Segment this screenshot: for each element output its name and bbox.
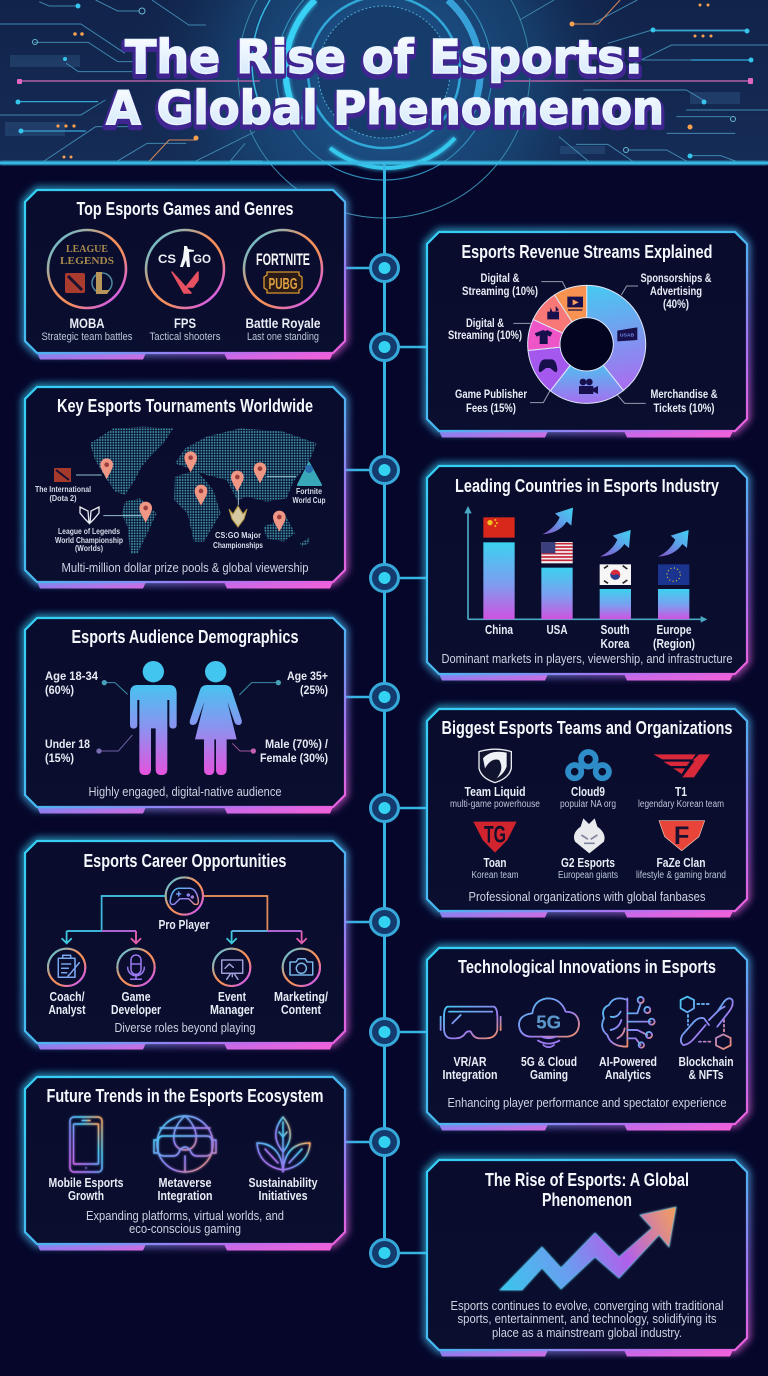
panel: key esports tournaments: [25, 387, 345, 588]
panel: top esports games and genres: [25, 190, 345, 360]
team labels: FaZe Clan: [656, 855, 706, 870]
donut labels: Game Publisher: [455, 389, 527, 401]
CS:GO major trophy and label: CS:GO Major: [215, 530, 262, 540]
team labels: Korean team: [472, 870, 518, 881]
donut labels: Streaming (10%): [448, 330, 522, 342]
caption: Expanding platforms, virtual worlds, and: [86, 1208, 284, 1223]
career labels: Event: [218, 990, 247, 1004]
title: [105, 30, 665, 138]
title: A Global Phenomenon: [105, 84, 665, 138]
demographic labels: (60%): [45, 683, 74, 697]
tech labels: Gaming: [530, 1067, 568, 1082]
donut labels: [448, 273, 718, 415]
donut labels: Fees (15%): [466, 403, 516, 415]
heading: Esports Revenue Streams Explained: [462, 242, 712, 262]
game ring: battle royale logos: [244, 230, 322, 308]
Worlds icon and label: (Worlds): [75, 543, 103, 553]
panel: audience demographics: [25, 618, 345, 814]
flag: South Korea: [600, 564, 631, 585]
career labels: Marketing/: [274, 990, 328, 1004]
icon: 5G cloud: 5G: [536, 1011, 561, 1032]
panel: leading countries: [427, 466, 747, 680]
game ring: MOBA logos: LEAGUE: [66, 244, 108, 255]
genre labels: Tactical shooters: [150, 331, 221, 343]
genre labels: [42, 315, 321, 343]
heading: Esports Career Opportunities: [84, 851, 286, 871]
Worlds icon and label: World Championship: [55, 535, 123, 545]
tech labels: Blockchain: [678, 1054, 734, 1069]
country labels: South: [600, 622, 630, 637]
team labels: Cloud9: [571, 784, 605, 799]
donut labels: Digital &: [466, 318, 504, 330]
conclusion text: place as a mainstream global industry.: [492, 1325, 682, 1340]
career labels: Coach/: [50, 990, 85, 1004]
logo: Team Liquid: [479, 749, 511, 783]
genre labels: FPS: [174, 315, 196, 331]
conclusion text: [450, 1298, 724, 1340]
caption: Highly engaged, digital-native audience: [88, 784, 282, 799]
logo: Cloud9: [568, 752, 609, 778]
game ring: MOBA logos: LEGENDS: [60, 255, 114, 267]
heading: Top Esports Games and Genres: [76, 199, 294, 219]
title: The Rise of Esports:: [125, 30, 643, 84]
career tree diagram: [48, 877, 320, 986]
CS:GO major trophy and label: Championships: [213, 540, 263, 550]
heading: [485, 1170, 689, 1210]
icon: VR headset: [441, 1007, 501, 1038]
country labels: China: [485, 622, 514, 637]
country labels: Europe: [656, 622, 692, 637]
dotted world map: [76, 427, 317, 554]
donut chart: USAB: [620, 333, 634, 339]
Worlds icon and label: League of Legends: [58, 526, 120, 536]
team labels: [450, 784, 726, 881]
country labels: Korea: [600, 636, 630, 651]
team labels: Toan: [484, 855, 507, 870]
tech labels: Analytics: [605, 1067, 651, 1082]
donut chart: [513, 282, 646, 403]
caption: Multi-million dollar prize pools & global viewership: [62, 560, 308, 575]
growth arrows: [542, 508, 689, 557]
career labels: Developer: [111, 1003, 161, 1017]
career labels: Pro Player: [158, 918, 210, 932]
heading: Key Esports Tournaments Worldwide: [57, 396, 313, 416]
demographic labels: Male (70%) /: [265, 737, 329, 751]
tech labels: 5G & Cloud: [521, 1054, 577, 1069]
team labels: lifestyle & gaming brand: [636, 870, 726, 881]
flag: China: [483, 517, 515, 538]
heading: Esports Audience Demographics: [72, 627, 298, 647]
caption: Diverse roles beyond playing: [114, 1020, 256, 1035]
demographic labels: [45, 669, 329, 765]
icon: metaverse headset: [154, 1116, 216, 1172]
logo: T1: [653, 754, 710, 777]
career labels: Game: [122, 990, 151, 1004]
zigzag growth arrow: [500, 1207, 676, 1290]
heading: Technological Innovations in Esports: [458, 957, 716, 977]
team logos: [473, 749, 710, 853]
team labels: popular NA org: [560, 799, 616, 810]
career labels: Analyst: [48, 1003, 86, 1017]
donut labels: Tickets (10%): [654, 403, 715, 415]
icon: AI brain: [602, 997, 655, 1048]
heading: Phenomenon: [542, 1190, 632, 1210]
male and female figures: [96, 661, 281, 775]
panel: biggest teams: [427, 709, 747, 918]
donut labels: Digital &: [480, 273, 520, 285]
icon: sustainability plant: [257, 1117, 310, 1172]
career labels: Content: [281, 1003, 322, 1017]
team labels: multi-game powerhouse: [450, 799, 540, 810]
panel: technological innovations: [427, 948, 747, 1130]
panel: career opportunities: [25, 841, 345, 1050]
game ring: FPS logos: [146, 230, 224, 308]
demographic labels: Age 35+: [287, 669, 328, 683]
icon: 5G cloud: [519, 998, 579, 1047]
genre labels: Last one standing: [247, 331, 319, 343]
tech labels: [442, 1054, 734, 1082]
trend labels: Integration: [158, 1189, 212, 1203]
Worlds icon and label: [55, 507, 123, 553]
demographic labels: Age 18-34: [45, 669, 98, 683]
conclusion text: Esports continues to evolve, converging with traditional: [450, 1298, 724, 1313]
logo: TG: TG: [484, 822, 506, 849]
Dota 2 icon and label: The International: [35, 484, 91, 494]
demographic labels: Under 18: [45, 737, 90, 751]
trend labels: [48, 1176, 318, 1203]
tech labels: VR/AR: [454, 1054, 487, 1069]
demographic labels: (25%): [300, 683, 328, 697]
tech labels: Integration: [442, 1067, 498, 1082]
logo: FaZe Clan: [659, 821, 705, 851]
demographic labels: Female (30%): [260, 751, 328, 765]
tech icons: [441, 997, 733, 1049]
icon: mobile phone: [70, 1117, 102, 1172]
game ring: battle royale logos: FORTNITE: [256, 250, 310, 269]
Fortnite World Cup icon and label: World Cup: [292, 495, 326, 505]
trend labels: Sustainability: [248, 1176, 318, 1190]
career labels: Manager: [210, 1003, 254, 1017]
genre labels: MOBA: [70, 315, 104, 331]
logo: TG: [473, 822, 517, 853]
logo: FaZe Clan: F: [674, 822, 689, 850]
donut labels: Merchandise &: [650, 389, 718, 401]
Fortnite World Cup icon and label: [292, 463, 326, 505]
demographic labels: (15%): [45, 751, 74, 765]
Dota 2 icon and label: [35, 468, 91, 503]
genre labels: Strategic team battles: [42, 331, 133, 343]
game ring: FPS logos: GO: [193, 252, 211, 266]
country labels: [485, 622, 695, 651]
game ring: FPS logos: CS: [158, 252, 176, 266]
trend labels: Mobile Esports: [48, 1176, 124, 1190]
title: The Rise of Esports:: [124, 33, 644, 87]
donut labels: Advertising: [650, 286, 702, 298]
bar chart with flags: [464, 506, 707, 623]
chart axes: [468, 510, 702, 619]
header banner: [0, 0, 768, 218]
Dota 2 icon and label: (Dota 2): [50, 493, 77, 503]
donut labels: Streaming (10%): [462, 286, 538, 298]
central timeline: [345, 163, 427, 1266]
genre labels: Battle Royale: [246, 315, 321, 331]
donut labels: Sponsorships &: [640, 273, 712, 285]
panel: future trends: [25, 1077, 345, 1250]
game ring: battle royale logos: PUBG: [268, 276, 298, 293]
team labels: European giants: [558, 870, 618, 881]
title: A Global Phenomenon: [106, 81, 664, 135]
caption: Professional organizations with global fanbases: [468, 889, 706, 904]
team labels: legendary Korean team: [638, 799, 724, 810]
caption: [86, 1208, 284, 1236]
donut labels: (40%): [663, 299, 689, 311]
trend labels: Growth: [68, 1189, 104, 1203]
caption: Enhancing player performance and spectator experience: [448, 1095, 726, 1110]
game ring: MOBA logos: [48, 230, 126, 308]
tech labels: & NFTs: [688, 1067, 724, 1082]
team labels: T1: [675, 784, 687, 799]
flag: Europe: [658, 564, 689, 585]
team labels: G2 Esports: [561, 855, 615, 870]
country labels: (Region): [653, 636, 695, 651]
trend labels: Initiatives: [258, 1189, 308, 1203]
logo: G2 Esports: [574, 818, 605, 853]
Fortnite World Cup icon and label: Fortnite: [296, 486, 322, 496]
career labels: [48, 918, 328, 1017]
conclusion text: sports, entertainment, and technology, solidifying its: [458, 1311, 717, 1326]
tech labels: AI-Powered: [599, 1054, 657, 1069]
CS:GO major trophy and label: [213, 506, 263, 550]
flag: USA: [541, 542, 573, 563]
caption: eco-conscious gaming: [129, 1221, 241, 1236]
trend labels: Metaverse: [158, 1176, 212, 1190]
header bottom line: [0, 162, 768, 164]
icon: blockchain link: [681, 997, 733, 1049]
panel: revenue streams: [427, 232, 747, 438]
country labels: USA: [546, 622, 568, 637]
heading: The Rise of Esports: A Global: [485, 1170, 689, 1190]
team labels: Team Liquid: [464, 784, 526, 799]
heading: Future Trends in the Esports Ecosystem: [46, 1086, 324, 1106]
panel: conclusion: [427, 1160, 747, 1356]
